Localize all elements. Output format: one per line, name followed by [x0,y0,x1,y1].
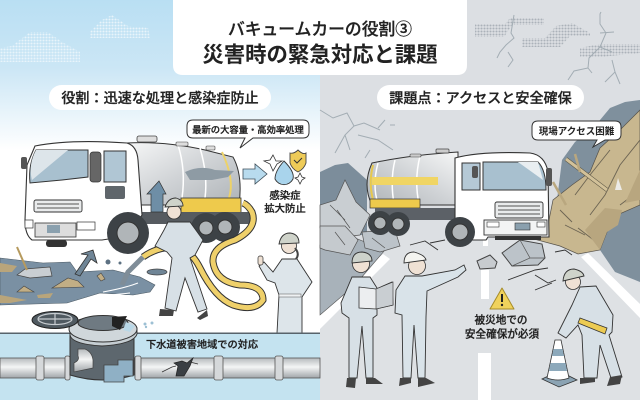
pipe couplings [36,356,283,380]
text: infection spread prevention: 感染症 [269,189,301,202]
panel: underground sewer cross-section [0,312,320,400]
background slope shadow [557,100,640,282]
callout: newest high-capacity processing [187,120,309,148]
icon: traffic cone [542,340,577,387]
title line 1: バキュームカーの役割③ [228,20,412,39]
broken pipes [0,358,70,378]
yellow stripe [372,177,438,185]
hose [143,203,263,308]
panel: left role scene background [0,0,320,400]
woman supervisor [259,259,312,333]
cab body [25,142,142,240]
road centre dashes [478,240,491,400]
heading: right panel issues: 課題点：アクセスと安全確保 [389,90,572,106]
door window [104,151,126,182]
clouds: dotted sky clouds [0,15,150,62]
debris mounds [0,263,53,303]
icon: right vacuum truck [367,149,552,247]
tank stain [185,168,234,180]
callout: newest high-capacity processing: 最新の大容量・高効率処理 [192,124,304,135]
road surface [320,240,640,400]
yellow chassis panel [181,198,241,213]
manhole chamber [70,335,134,380]
suction arrow on truck [147,181,166,212]
tank [367,152,458,205]
manhole lid [32,312,78,328]
arrow: to infection prevention [243,164,267,184]
figure: engineer pointing [395,252,466,387]
wheels [107,212,240,254]
road boulders [502,240,545,266]
door window [462,163,480,190]
wheels [368,211,475,247]
title line 2: 災害時の緊急対応と課題 [202,43,438,67]
figure: worker placing cone [558,269,622,386]
road edge lines [320,253,640,329]
side mirror [21,157,27,169]
pipe crack [174,358,193,376]
text: sewer damage area response: 下水道被害地域での対応 [146,338,258,351]
road cracks [410,240,572,290]
grille [25,200,95,237]
figure: engineer with map [341,252,393,388]
heading: left panel role [49,85,271,110]
worker with hose [155,222,207,312]
dotted storm clouds [475,18,640,57]
text: safety note: 安全確保が必須 [465,328,539,340]
fallen tree [553,154,607,205]
left bush and rock pile [320,163,367,235]
panel: right landslide and rocks [320,100,640,315]
windscreen [483,162,546,190]
text: infection spread prevention [264,189,306,215]
icon: warning triangle [490,288,514,309]
text: safety note [465,314,539,340]
lightning-like sky cracks [320,12,620,158]
icon: drop, shield and sparkles [264,150,306,185]
windscreen [30,150,88,183]
panel: right issue scene background [320,0,640,400]
callout: site access difficult: 現場アクセス困難 [539,126,615,138]
landslide earth [530,110,640,254]
dark arrow up [75,250,97,276]
chassis yellow panel [370,199,420,208]
text: safety note: 被災地での [475,314,527,326]
heading: right panel issues [377,85,584,110]
tank [127,143,240,205]
elbow pipes in chamber [74,349,93,372]
cab [455,153,549,240]
puddle [0,258,155,305]
heading: left panel role: 役割：迅速な処理と感染症防止 [61,90,259,106]
mirror [546,168,552,186]
title box [173,0,467,75]
grille [484,202,547,235]
callout: site access difficult [532,121,621,147]
text: infection spread prevention: 拡大防止 [264,202,306,215]
panel: left truck and hose scene [0,136,312,333]
